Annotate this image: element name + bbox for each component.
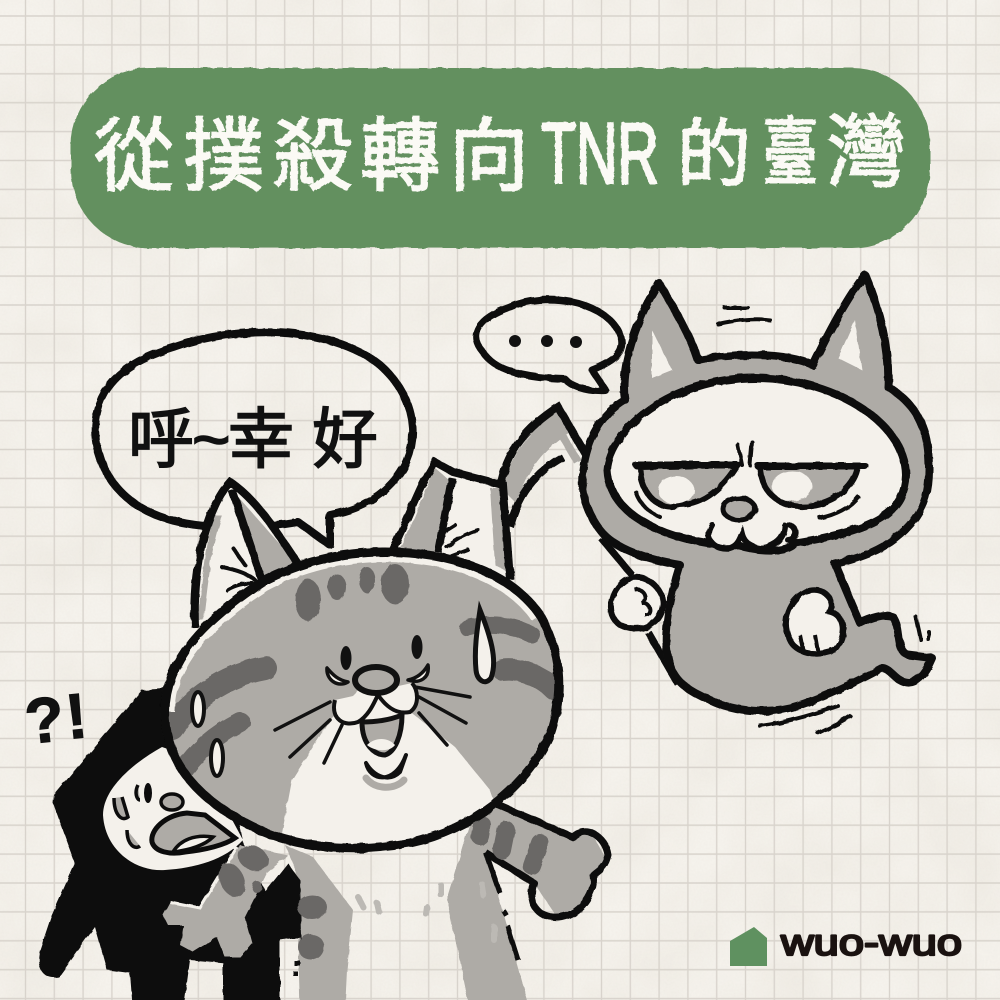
whiskers (275, 687, 470, 763)
title text (94, 106, 906, 202)
right body grey stripe (447, 803, 605, 1000)
ghost paw on scythe (611, 577, 663, 629)
nose (355, 667, 397, 693)
sweat drops (475, 610, 494, 682)
surprise marks (21, 679, 91, 758)
surprise marks: ! (62, 679, 91, 753)
black clothing piece (223, 863, 302, 1000)
small character nose (161, 794, 183, 810)
leg stripes (297, 895, 327, 919)
speech bubble: ellipsis (476, 300, 622, 391)
mouth (362, 715, 402, 755)
logo wordmark: wuo-wuo (780, 922, 962, 963)
faint markings (358, 884, 494, 940)
title banner (71, 68, 930, 248)
left ear (195, 482, 300, 627)
ghost cat (582, 275, 932, 733)
ghost mouth (709, 525, 796, 548)
dashed body line (294, 853, 518, 974)
right arm stripes (480, 825, 540, 866)
scythe held by ghost cat (500, 407, 678, 684)
small character face (103, 747, 243, 870)
right ear (393, 462, 510, 580)
ghost paw on body (786, 590, 843, 654)
logo house (730, 927, 767, 966)
surprise marks: ? (21, 682, 68, 758)
title text: 的 (677, 113, 751, 196)
title text: TNR (541, 106, 659, 202)
left body grey (285, 845, 353, 1000)
main cat body (163, 803, 608, 1000)
muzzle (334, 683, 417, 724)
main cat ears (195, 462, 510, 627)
bubble text: 呼~幸好 (128, 402, 378, 476)
eyes (340, 646, 352, 670)
title text: 從撲殺轉向 (94, 112, 529, 201)
ghost body and head (582, 275, 932, 711)
chin (366, 755, 406, 778)
motion marks (718, 308, 929, 733)
ghost eyes (640, 465, 737, 507)
logo (730, 922, 962, 966)
main cat head (165, 552, 559, 860)
speech bubble: relief (95, 332, 413, 545)
small character tongue (152, 813, 235, 853)
head markings (165, 552, 555, 860)
sweat marks (114, 785, 140, 847)
small character eye (144, 783, 152, 803)
title text: 臺 (762, 112, 818, 194)
small black character (21, 679, 270, 1000)
right arm outline (486, 803, 608, 918)
left arm (163, 845, 288, 957)
ghost face (607, 378, 906, 551)
ghost inner ears (652, 330, 672, 378)
title text: 灣 (826, 108, 906, 197)
ghost nose (723, 498, 755, 520)
